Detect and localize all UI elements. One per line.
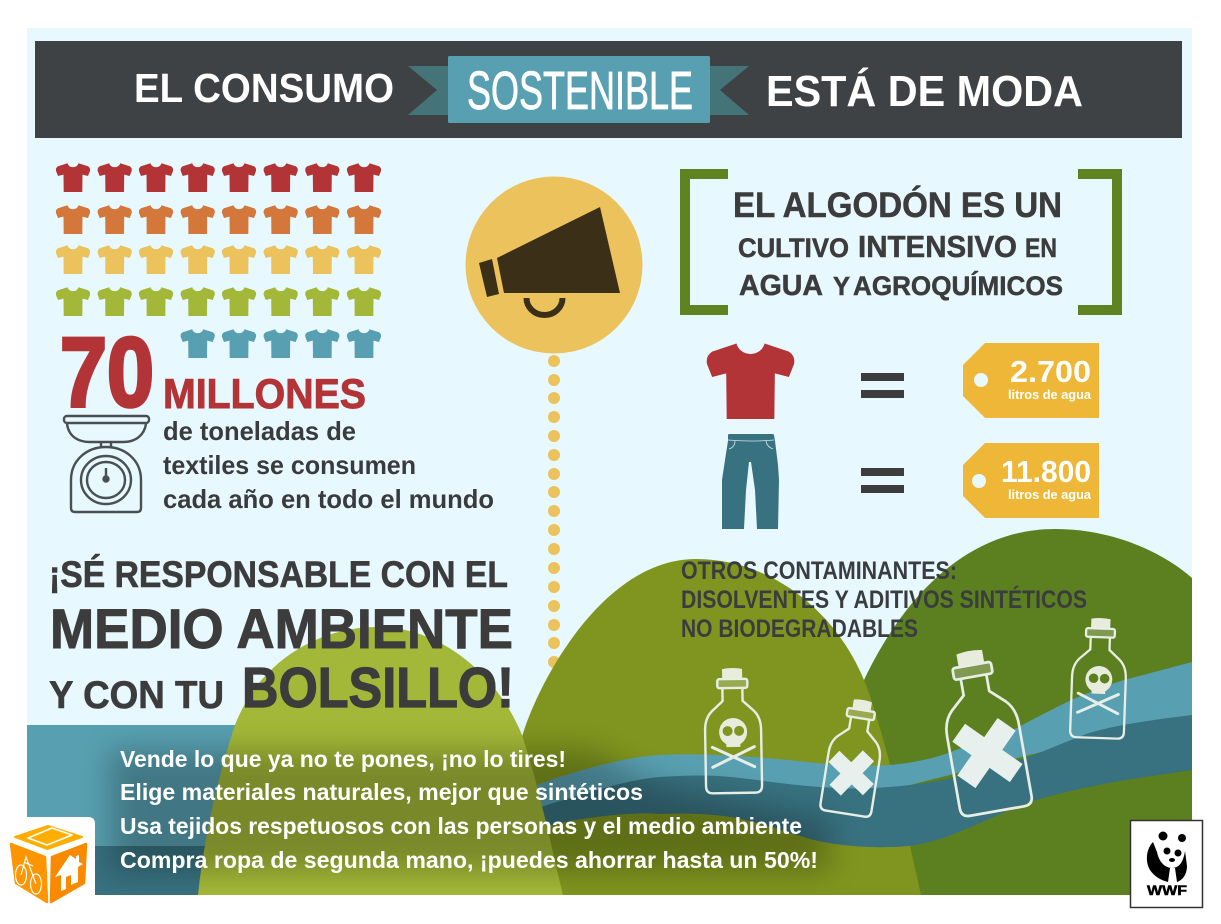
statistic description: textiles se consumen [163, 450, 416, 480]
callout: cotton heading with brackets: CULTIVO [738, 233, 849, 263]
statistic: 70 millones: MILLONES [163, 370, 366, 417]
teal shirts [181, 329, 381, 358]
ribbon [408, 56, 749, 123]
heading: be responsible [49, 554, 514, 720]
header banner [35, 41, 1182, 138]
heading: be responsible: Y CON TU [49, 674, 224, 717]
callout: cotton heading with brackets [685, 174, 1117, 310]
title: right part: ESTÁ DE MODA [766, 66, 1083, 116]
heading: be responsible: BOLSILLO! [242, 656, 514, 720]
heading: be responsible: ¡SÉ RESPONSABLE CON EL [49, 554, 508, 595]
text: tips list: Vende lo que ya no te pones, ¡no lo tires! [120, 746, 566, 772]
icon: large red t-shirt [707, 344, 794, 419]
price tag: 2.700 litros: litros de agua [1008, 387, 1092, 402]
statistic description: cada año en todo el mundo [163, 484, 494, 514]
shadow behind tips text [110, 750, 830, 872]
heading: be responsible: MEDIO AMBIENTE [50, 597, 513, 660]
text: other pollutants: DISOLVENTES Y ADITIVOS SINTÉTICOS [681, 585, 1087, 614]
callout: cotton heading with brackets: EN [1025, 233, 1057, 263]
icon: poison bottle 1 [704, 668, 762, 793]
statistic: 70 millones: 70 [60, 317, 154, 427]
statistic description: de toneladas de [163, 416, 356, 446]
price tag: 11.800 litros: 11.800 [1001, 454, 1091, 489]
red shirts [56, 163, 381, 192]
right hill [864, 529, 1192, 895]
yellow shirts [56, 245, 381, 274]
icon: poison bottle 4 [1070, 617, 1128, 739]
left hill [198, 627, 563, 895]
river dark band [510, 715, 1192, 847]
text: tips list: Compra ropa de segunda mano, ¡puedes ahorrar hasta un 50%! [120, 847, 818, 873]
icon: bottle 3 with cross [933, 645, 1033, 817]
logo: WWF panda [1130, 820, 1202, 908]
text: other pollutants: NO BIODEGRADABLES [681, 615, 918, 643]
equals sign: shirt [861, 373, 904, 398]
callout: cotton heading with brackets: EL ALGODÓN ES UN [733, 185, 1062, 225]
icon: jeans [722, 434, 779, 529]
callout: cotton heading with brackets: Y [833, 271, 850, 301]
icon: bottle 2 with cross [820, 696, 888, 818]
callout: cotton heading with brackets: AGROQUÍMICOS [853, 270, 1063, 301]
text: other pollutants: OTROS CONTAMINANTES: [681, 557, 957, 585]
orange shirts [56, 205, 381, 234]
price tag: 2.700 litros [963, 343, 1099, 418]
pictogram: rows of t-shirts [56, 163, 381, 358]
price tag: 2.700 litros: 2.700 [1010, 354, 1091, 389]
left water block [27, 725, 235, 895]
river light band [536, 662, 1192, 806]
ribbon: SOSTENIBLE [467, 61, 693, 121]
text: tips list [120, 746, 818, 873]
statistic: 70 millones [60, 317, 366, 427]
callout: cotton heading with brackets: INTENSIVO [858, 229, 1017, 264]
landscape: hills and river [27, 529, 1192, 895]
callout: cotton heading with brackets: AGUA [739, 270, 823, 302]
statistic description [163, 416, 494, 514]
logo: WWF panda: WWF [1147, 882, 1188, 898]
text: other pollutants [681, 557, 1087, 643]
middle hill [500, 559, 921, 895]
green shirts [56, 287, 381, 316]
dotted line from megaphone [548, 355, 560, 668]
icon: megaphone in circle [466, 176, 642, 354]
text: tips list: Elige materiales naturales, mejor que sintéticos [120, 779, 643, 805]
price tag: 11.800 litros [963, 443, 1099, 518]
equals sign: jeans [861, 468, 904, 493]
logo: orange cube [0, 817, 95, 902]
text: tips list: Usa tejidos respetuosos con las personas y el medio ambiente [120, 813, 802, 839]
price tag: 11.800 litros: litros de agua [1008, 487, 1092, 502]
title: left part: EL CONSUMO [134, 65, 394, 111]
icon: kitchen scale [64, 416, 149, 512]
